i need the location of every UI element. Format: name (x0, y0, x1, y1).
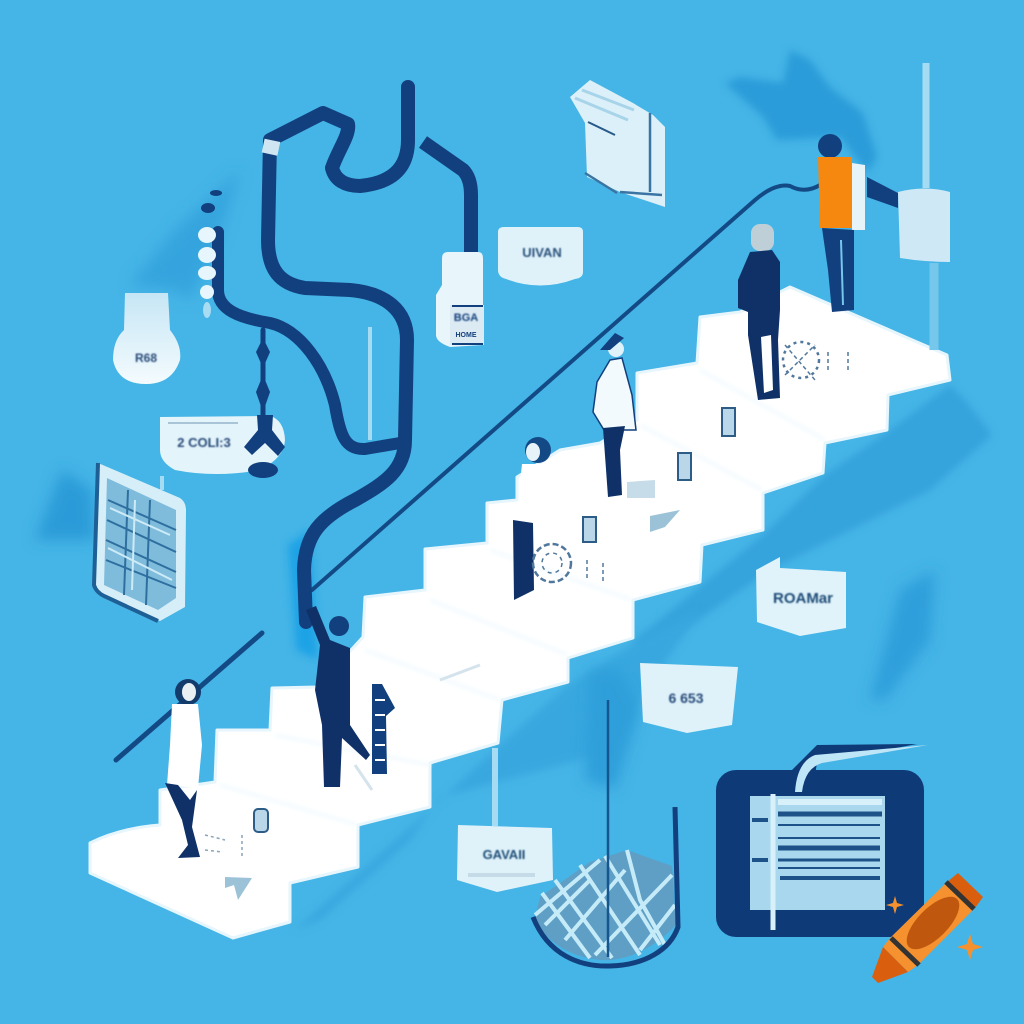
icon: monitor with document (716, 744, 928, 937)
icon: wall box right (898, 188, 950, 262)
person: man in navy (738, 224, 780, 400)
logo: orange crayon with sparkles (872, 873, 983, 983)
pipe joint seam (262, 139, 280, 156)
icon: small cards (254, 408, 735, 832)
icon: paper arrows (225, 480, 680, 900)
icon: spine chain (198, 190, 222, 318)
icon: bulb bottle left: R68 (135, 351, 157, 365)
label: 6 653: 6 653 (668, 690, 704, 706)
label: bottom tag (457, 825, 553, 892)
pipe network (218, 87, 471, 622)
icon: scribbles (205, 342, 848, 858)
icon: bottle with label: BGA (454, 312, 478, 324)
person: lower navy walker (306, 606, 370, 787)
icon: hanging connector (244, 338, 285, 478)
label: ROAMar: ROAMar (773, 590, 833, 607)
diagonal handrail (116, 185, 820, 760)
icon: open folder (570, 80, 665, 207)
label: UIVAN: UIVAN (522, 245, 562, 260)
person: woman in white (593, 333, 636, 497)
icon: bottle with label (436, 252, 484, 347)
staircase (90, 287, 950, 938)
thin vertical poles (162, 63, 934, 826)
icon: striped panel (372, 684, 395, 774)
icon: tablet device (94, 463, 186, 621)
label: 2 coli: 2 COLI:3 (177, 435, 231, 450)
icon: bottle with label: HOME (456, 332, 477, 339)
icon: bulb bottle left (113, 293, 180, 384)
label: ROAMar (756, 557, 846, 636)
icon: net basket (533, 700, 678, 966)
stair decorations (205, 342, 848, 900)
person: mid stairs (513, 437, 552, 600)
label: 6 653 (640, 663, 738, 733)
label: 2 coli (160, 416, 285, 474)
label: bottom tag: GAVAII (483, 847, 525, 862)
person: woman bottom (165, 679, 202, 858)
label: UIVAN (498, 227, 583, 286)
person: top with orange vest (818, 134, 898, 312)
